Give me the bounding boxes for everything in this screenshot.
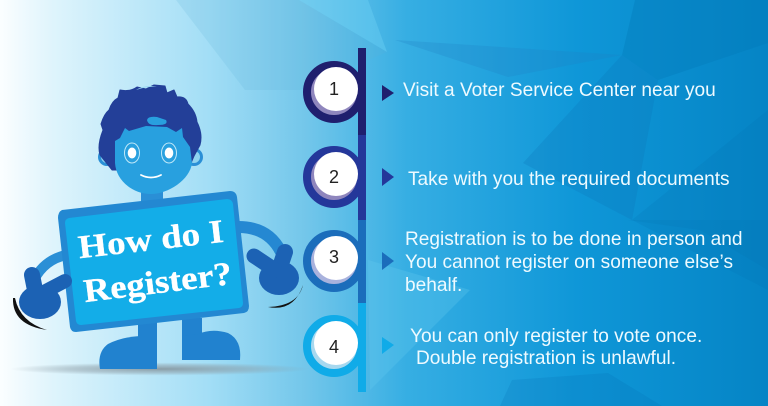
right hand bbox=[254, 252, 299, 295]
smile bbox=[141, 175, 161, 178]
sign title: How do I bbox=[76, 214, 225, 266]
step 1 marker: 1 bbox=[329, 79, 339, 99]
step 1 text: Visit a Voter Service Center near you bbox=[403, 80, 716, 101]
left hand bbox=[19, 275, 65, 319]
step 4 text bbox=[410, 326, 702, 369]
step 3 marker: 3 bbox=[329, 247, 339, 267]
motion mark right bbox=[268, 285, 303, 308]
step 4 text: Double registration is unlawful. bbox=[416, 348, 676, 369]
face bbox=[115, 126, 192, 194]
step 4 text: You can only register to vote once. bbox=[410, 326, 702, 347]
step 1 marker bbox=[307, 65, 361, 119]
ground shadow bbox=[10, 362, 310, 376]
neck bbox=[141, 185, 163, 205]
step 3 text: Registration is to be done in person and bbox=[405, 229, 743, 250]
step 2 marker: 2 bbox=[329, 167, 339, 187]
step 3 text bbox=[405, 229, 743, 296]
sign board bbox=[58, 191, 249, 332]
legs and feet bbox=[99, 318, 240, 369]
step 3 text: behalf. bbox=[405, 275, 462, 296]
eyes bbox=[124, 143, 176, 163]
step 3 text: You cannot register on someone else’s bbox=[405, 252, 733, 273]
step 2 marker bbox=[307, 150, 361, 204]
ears bbox=[100, 150, 114, 164]
character: boy holding sign bbox=[13, 85, 303, 369]
step 4 arrow bbox=[382, 337, 394, 354]
step 2 text: Take with you the required documents bbox=[408, 169, 730, 190]
timeline spine bbox=[358, 48, 366, 392]
sign title bbox=[76, 214, 234, 310]
forelock bbox=[147, 117, 167, 125]
left arm bbox=[34, 255, 66, 280]
step 3 arrow bbox=[382, 252, 394, 270]
step 4 marker: 4 bbox=[329, 337, 339, 357]
step 1 arrow bbox=[382, 85, 394, 101]
hair bbox=[99, 85, 201, 170]
step 4 marker bbox=[307, 319, 361, 373]
step 2 arrow bbox=[382, 168, 394, 186]
motion mark left bbox=[13, 298, 47, 330]
step 3 marker bbox=[307, 234, 361, 288]
right arm bbox=[236, 227, 281, 252]
light streak in hair bbox=[136, 86, 157, 90]
sign title: Register? bbox=[82, 256, 234, 310]
